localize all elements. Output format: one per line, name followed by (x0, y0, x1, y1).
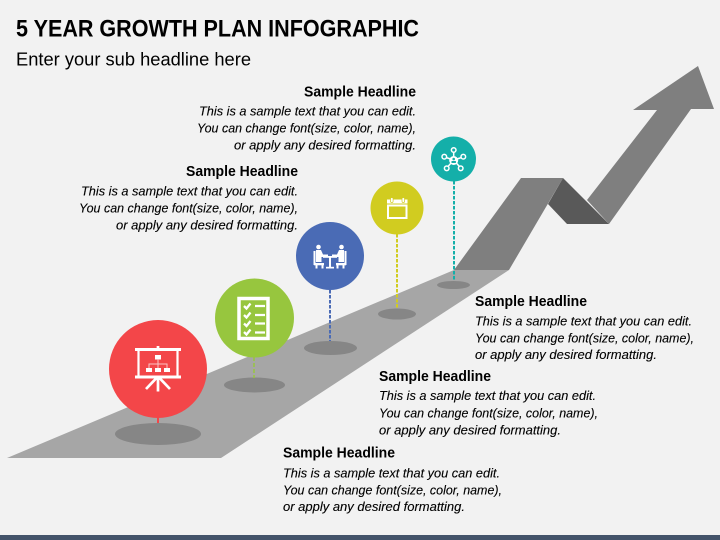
text block: second headline: You can change font(size, color, name), (79, 200, 298, 215)
text block: right headline: or apply any desired formatting. (475, 347, 657, 362)
text block: bottom headline: You can change font(size, color, name), (283, 482, 502, 497)
icon: meeting at table (314, 245, 346, 268)
text block: middle headline: or apply any desired formatting. (379, 422, 561, 437)
text block: right headline: Sample Headline (475, 294, 587, 310)
text block: second headline: or apply any desired formatting. (116, 217, 298, 232)
text block: middle headline: You can change font(size, color, name), (379, 405, 598, 420)
text block: bottom headline: This is a sample text that you can edit. (283, 465, 500, 480)
text block: bottom headline: Sample Headline (283, 446, 395, 462)
text block: second headline: Sample Headline (186, 164, 298, 180)
text block: middle headline (379, 369, 598, 437)
marker 4: yellow (370, 182, 424, 320)
icon: network (442, 148, 466, 171)
text block: middle headline: Sample Headline (379, 369, 491, 385)
text block: top headline: or apply any desired formatting. (234, 137, 416, 152)
marker 2: green (215, 278, 294, 392)
marker 1: red (109, 320, 207, 445)
text block: top headline: Sample Headline (304, 84, 416, 100)
marker 3: blue (296, 222, 364, 355)
text block: bottom headline (283, 446, 502, 514)
icon: calendar (387, 198, 408, 218)
text block: right headline (475, 294, 694, 362)
text block: right headline: You can change font(size, color, name), (475, 330, 694, 345)
growth arrow road (7, 66, 714, 458)
text block: second headline (79, 164, 298, 232)
title: 5 YEAR GROWTH PLAN INFOGRAPHIC (16, 16, 419, 43)
footer bar (0, 535, 720, 540)
text block: top headline: You can change font(size, color, name), (197, 120, 416, 136)
text block: middle headline: This is a sample text that you can edit. (379, 388, 596, 403)
subtitle: Enter your sub headline here (16, 50, 251, 70)
marker 5: teal (431, 136, 476, 289)
text block: second headline: This is a sample text that you can edit. (81, 183, 298, 198)
text block: right headline: This is a sample text that you can edit. (475, 313, 692, 328)
icon: checklist (239, 298, 268, 338)
text block: top headline: This is a sample text that you can edit. (199, 103, 416, 118)
text block: top headline (197, 84, 416, 152)
text block: bottom headline: or apply any desired formatting. (283, 499, 465, 514)
icon: presentation board (135, 346, 181, 392)
